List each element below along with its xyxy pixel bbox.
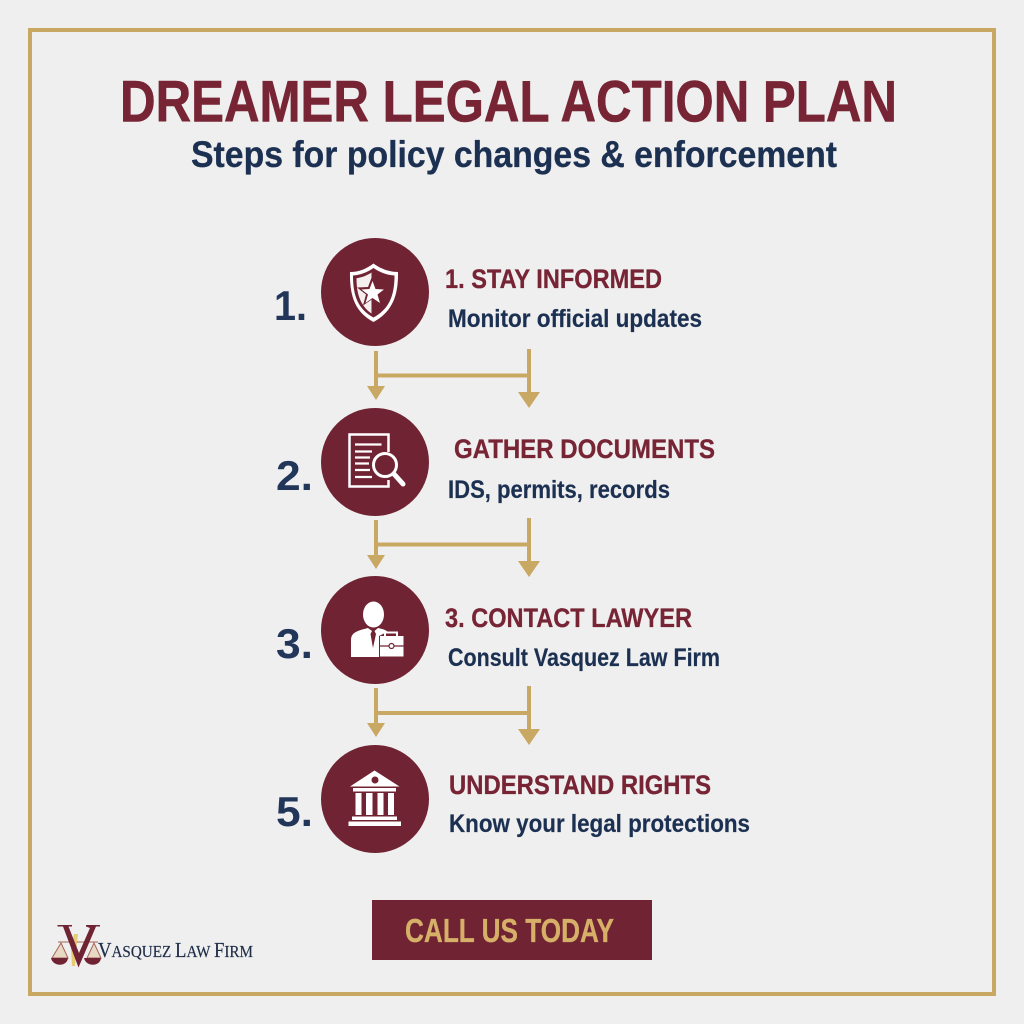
logo pans <box>51 958 101 965</box>
step 1 description: Monitor official updates <box>448 305 702 333</box>
step 3 <box>276 576 720 684</box>
icon: shield with star <box>350 264 398 322</box>
step 5 heading: UNDERSTAND RIGHTS <box>449 770 711 800</box>
call to action button: CALL US TODAY <box>405 912 614 949</box>
logo V monogram <box>58 925 100 968</box>
step 2 heading: GATHER DOCUMENTS <box>454 434 715 464</box>
logo scales <box>52 942 101 958</box>
step 3 number: 3. <box>276 620 313 667</box>
logo wordmark: VASQUEZ LAW FIRM <box>98 938 253 962</box>
arrows: step 2 to 3 <box>367 518 540 577</box>
subtitle: Steps for policy changes & enforcement <box>191 134 837 175</box>
logo gold sword <box>71 934 78 966</box>
icon: lawyer with briefcase <box>351 602 404 657</box>
title: DREAMER LEGAL ACTION PLAN <box>120 70 897 134</box>
arrows: step 1 to 2 <box>367 349 540 408</box>
step 1 circle <box>321 238 429 346</box>
step 5 <box>276 745 750 853</box>
step 1 <box>274 238 702 346</box>
step 2 description: IDS, permits, records <box>448 476 670 504</box>
step 3 circle <box>321 576 429 684</box>
step 1 heading: 1. STAY INFORMED <box>445 264 662 294</box>
step 3 heading: 3. CONTACT LAWYER <box>445 603 692 633</box>
step 5 number: 5. <box>276 788 313 835</box>
icon: courthouse <box>348 770 401 826</box>
icon: document with magnifier <box>350 434 403 486</box>
logo: Vasquez Law Firm <box>51 925 253 968</box>
step 2 circle <box>321 408 429 516</box>
step 5 description: Know your legal protections <box>449 810 750 838</box>
step 2 number: 2. <box>276 452 313 499</box>
step 3 description: Consult Vasquez Law Firm <box>448 644 720 672</box>
step 1 number: 1. <box>274 282 307 329</box>
step 5 circle <box>321 745 429 853</box>
arrows: step 3 to 4 <box>367 686 540 745</box>
call to action button <box>372 900 652 960</box>
step 2 <box>276 408 715 516</box>
